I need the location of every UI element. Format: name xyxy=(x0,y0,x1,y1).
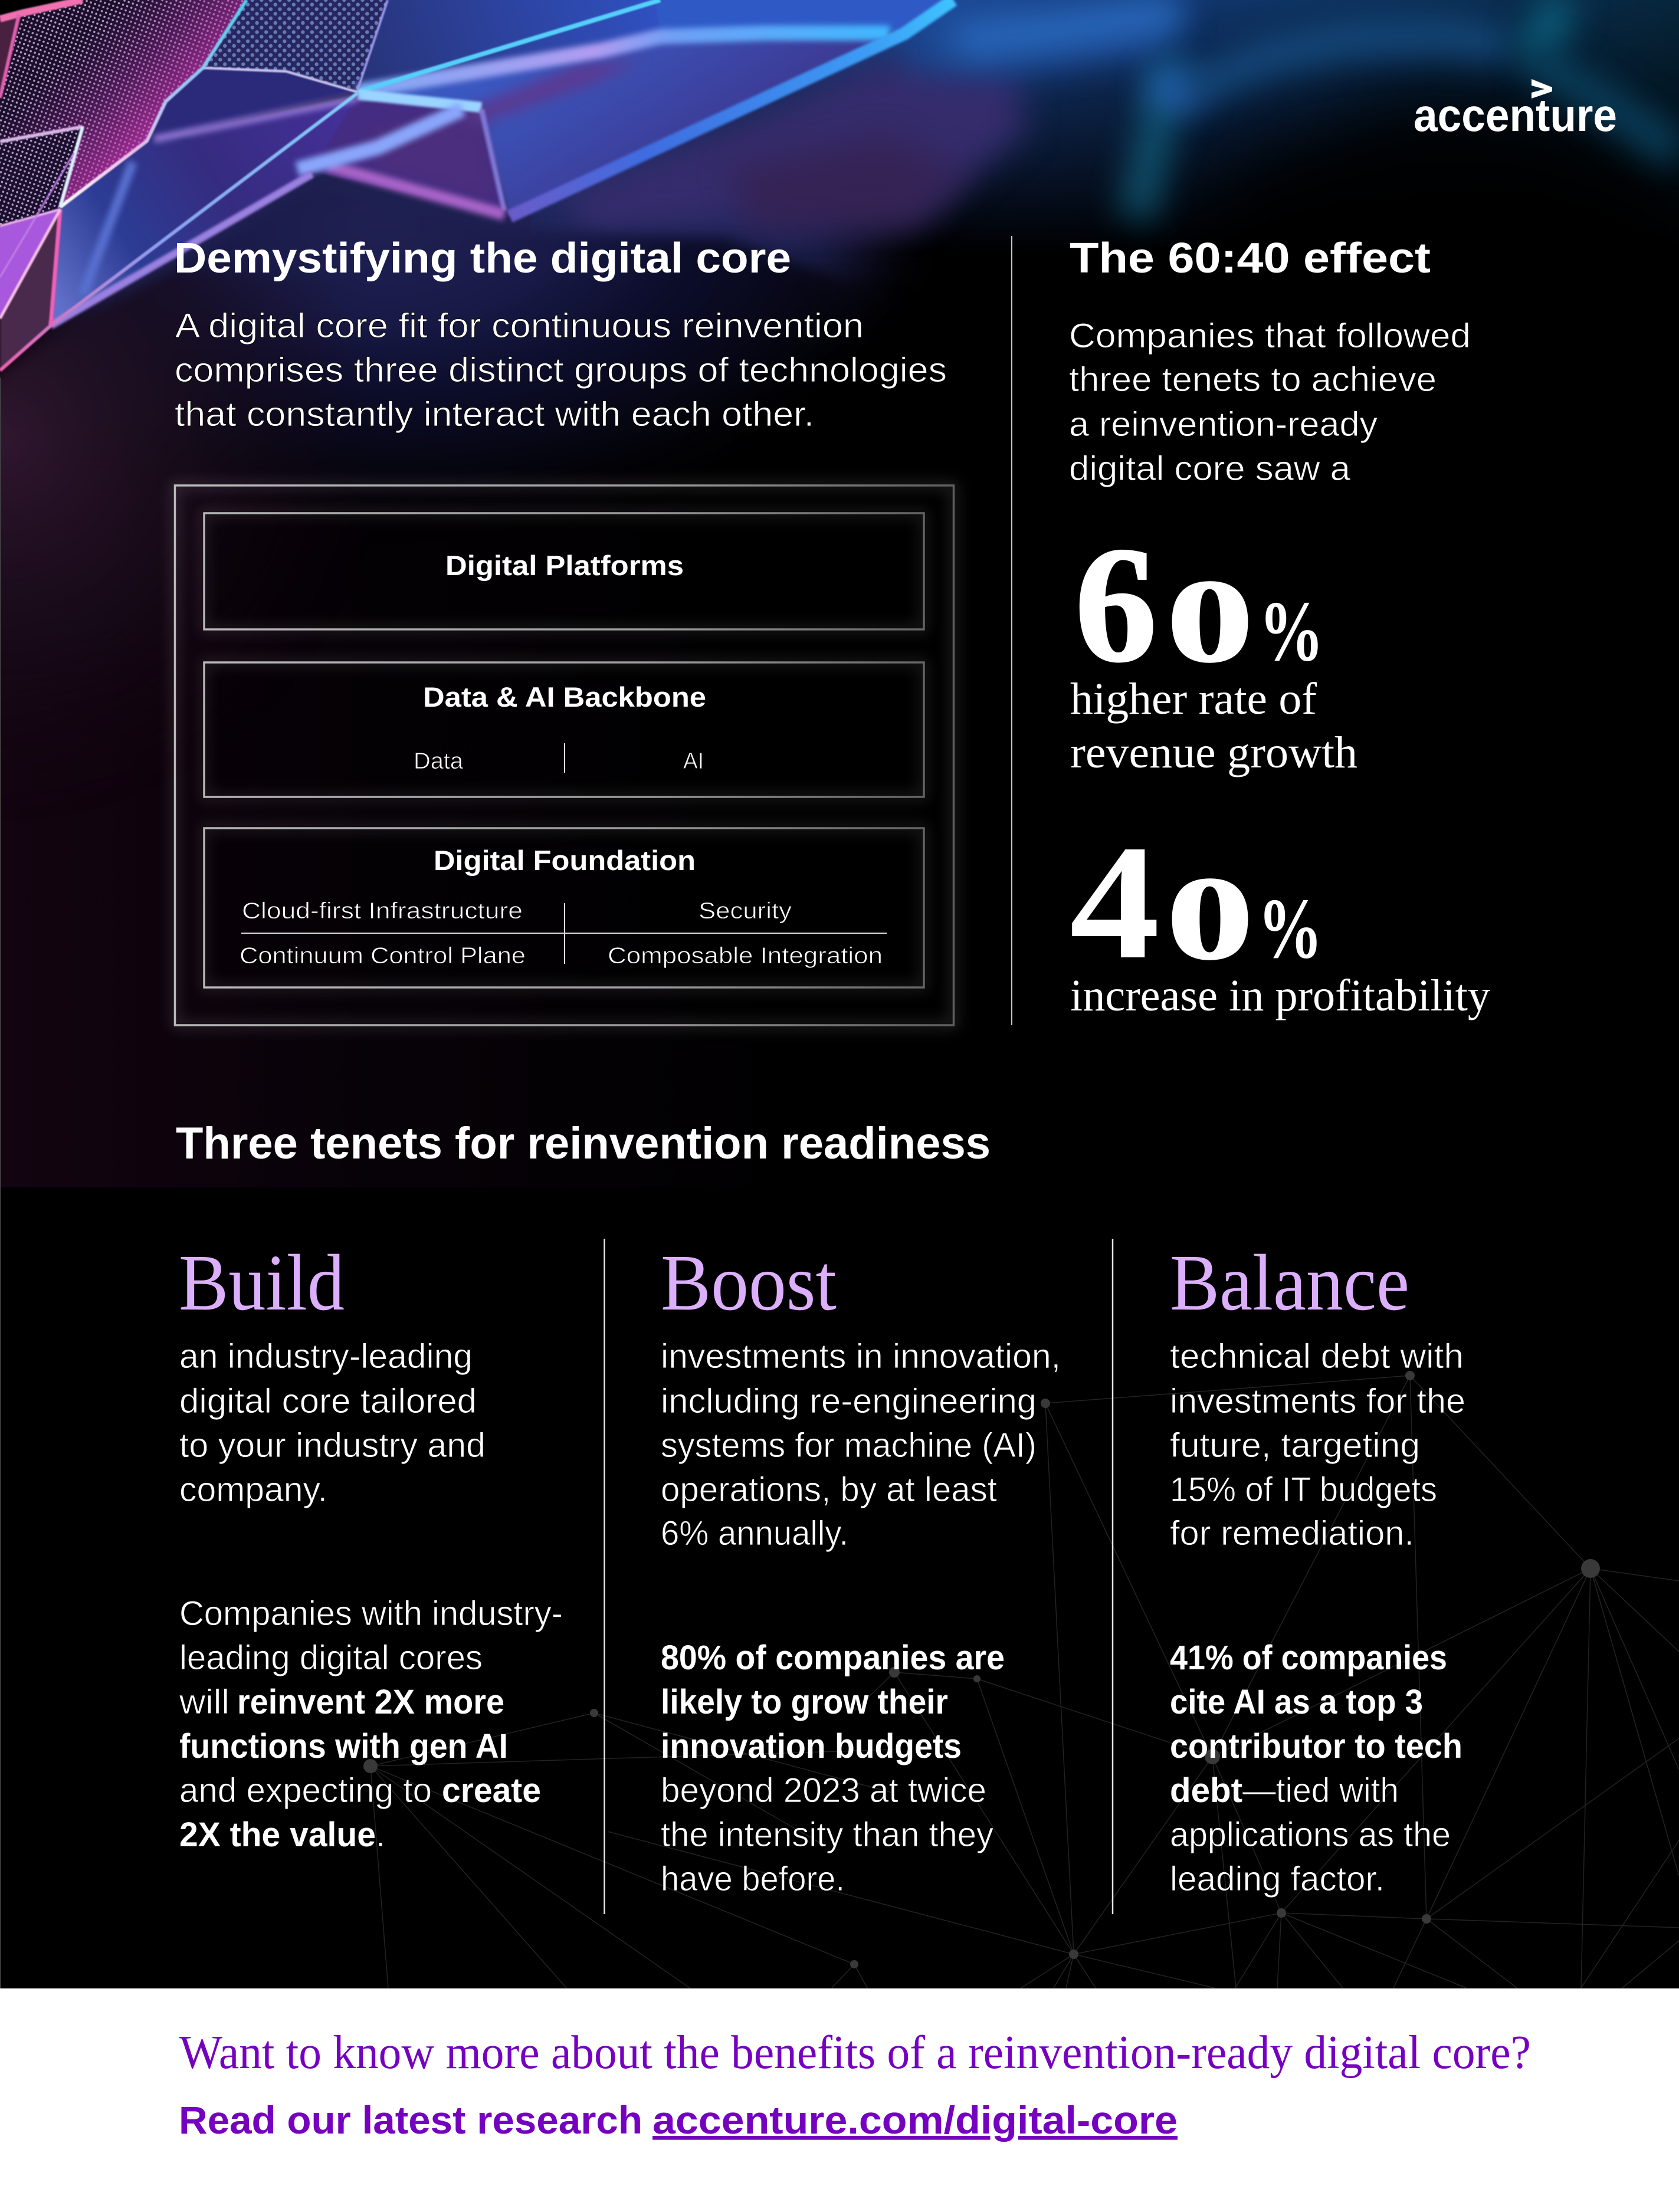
box: Digital Platforms xyxy=(204,513,924,629)
box: Data and AI Backbone xyxy=(204,662,924,797)
panel: Boost: innovation budgets xyxy=(661,1727,962,1765)
panel: Build: reinvent 2X more xyxy=(237,1683,504,1721)
accenture logo: accenture xyxy=(1414,89,1617,141)
panel: Build: . xyxy=(376,1816,385,1854)
background network of nodes and lines xyxy=(363,1371,1679,1988)
panel: Balance: for remediation. xyxy=(1170,1514,1414,1553)
panel: Build: an industry-leading xyxy=(179,1337,473,1376)
panel: Balance: —tied with xyxy=(1242,1771,1399,1810)
box: Digital Foundation: Continuum Control Plane xyxy=(240,943,526,969)
box: Digital Foundation: Digital Foundation xyxy=(434,845,696,876)
panel: Balance: technical debt with xyxy=(1170,1337,1464,1376)
stat: 60 percent: 0 xyxy=(1167,556,1253,687)
panel: Balance: leading factor. xyxy=(1170,1860,1385,1898)
box: Data and AI Backbone: Data & AI Backbone xyxy=(423,681,706,713)
intro text: A digital core fit for continuous reinvention xyxy=(175,307,864,345)
stat: 60 percent: % xyxy=(1259,583,1324,679)
panel: Balance xyxy=(1170,1239,1465,1898)
panel: Boost: investments in innovation, xyxy=(661,1337,1061,1376)
intro text: that constantly interact with each other. xyxy=(175,395,814,434)
60:40 intro text: Companies that followed xyxy=(1069,317,1471,355)
panel: Build: Build xyxy=(179,1239,345,1327)
panel: Build: leading digital cores xyxy=(179,1639,483,1677)
60:40 intro text: a reinvention-ready xyxy=(1069,405,1378,444)
prism faces xyxy=(51,0,962,326)
intro text xyxy=(175,307,947,434)
soft purple haze xyxy=(560,59,1027,236)
panel: Boost: the intensity than they xyxy=(661,1816,993,1854)
60:40 intro text: three tenets to achieve xyxy=(1069,360,1437,399)
box: Digital Foundation: Cloud-first Infrastructure xyxy=(242,898,523,924)
box: Digital Foundation xyxy=(204,828,924,987)
stat: 40 percent: 0 xyxy=(1167,854,1253,984)
panel: Boost: systems for machine (AI) xyxy=(661,1426,1037,1465)
60:40 intro text xyxy=(1069,317,1471,488)
stat: 40 percent xyxy=(1070,812,1490,1020)
panel: Balance: investments for the xyxy=(1170,1382,1465,1420)
footer call to action xyxy=(179,2098,1178,2142)
panel: Boost: have before. xyxy=(661,1860,845,1898)
60:40 intro text: digital core saw a xyxy=(1069,449,1351,488)
panel: Balance: cite AI as a top 3 xyxy=(1170,1683,1423,1721)
panel: Build: will xyxy=(179,1683,229,1721)
panel: Boost xyxy=(661,1239,1061,1898)
box: Data and AI Backbone: Data xyxy=(414,749,463,774)
panel: Balance: 41% of companies xyxy=(1170,1639,1447,1677)
panel: Boost: Boost xyxy=(661,1239,837,1327)
panel: Build: 2X the value xyxy=(179,1816,376,1854)
panel: Build: company. xyxy=(179,1471,327,1509)
mesh panel xyxy=(0,0,247,207)
panel: Balance: 15% of IT budgets xyxy=(1170,1471,1437,1509)
stat: 40 percent: % xyxy=(1258,881,1323,976)
footer question: Want to know more about the benefits of a reinvention-ready digital core? xyxy=(179,2027,1531,2079)
glowing ribbons xyxy=(358,33,890,91)
box: Digital Foundation: Composable Integration xyxy=(608,943,883,969)
panel: Build xyxy=(179,1239,563,1854)
box: Digital Foundation: Security xyxy=(699,898,792,924)
stat: 60 percent: higher rate of xyxy=(1070,674,1317,724)
heading: Three tenets for reinvention readiness: Three tenets for reinvention readiness xyxy=(176,1118,991,1169)
stat: 60 percent: revenue growth xyxy=(1070,728,1357,777)
heading: Demystifying the digital core: Demystifying the digital core xyxy=(174,235,791,282)
panel: Build: Companies with industry- xyxy=(179,1594,563,1633)
stat: 40 percent: increase in profitability xyxy=(1070,971,1490,1020)
panel: Boost: likely to grow their xyxy=(661,1683,948,1721)
panel: Balance: contributor to tech xyxy=(1170,1727,1462,1765)
stat: 60 percent xyxy=(1070,513,1357,777)
heading: The 60:40 effect: The 60:40 effect xyxy=(1070,235,1431,282)
stat: 40 percent: 4 xyxy=(1070,812,1160,993)
panel: digital core diagram xyxy=(175,485,953,1025)
footer call to action: Read our latest research xyxy=(179,2098,642,2142)
panel: Balance: applications as the xyxy=(1170,1816,1451,1854)
panel: Balance: debt xyxy=(1170,1771,1242,1810)
panel: Build: create xyxy=(442,1771,541,1810)
panel: Boost: operations, by at least xyxy=(661,1471,997,1509)
panel: Build: digital core tailored xyxy=(179,1382,477,1420)
panel: Boost: including re-engineering xyxy=(661,1382,1037,1420)
box: Digital Platforms: Digital Platforms xyxy=(445,550,684,581)
panel: Build: to your industry and xyxy=(179,1426,486,1465)
panel: Balance: future, targeting xyxy=(1170,1426,1420,1465)
footer call to action: accenture.com/digital-core xyxy=(652,2098,1178,2142)
intro text: comprises three distinct groups of technologies xyxy=(175,351,947,389)
panel: Build: and expecting to xyxy=(179,1771,432,1810)
stat: 60 percent: 6 xyxy=(1075,513,1157,696)
footer band xyxy=(0,1988,1679,2212)
panel: Boost: beyond 2023 at twice xyxy=(661,1771,986,1810)
lower glow behind the text xyxy=(0,188,1015,826)
box: Data and AI Backbone: AI xyxy=(683,749,704,774)
panel: Balance: Balance xyxy=(1170,1239,1409,1327)
panel: Boost: 6% annually. xyxy=(661,1514,848,1553)
panel: Build: functions with gen AI xyxy=(179,1727,508,1765)
panel: Boost: 80% of companies are xyxy=(661,1639,1005,1677)
